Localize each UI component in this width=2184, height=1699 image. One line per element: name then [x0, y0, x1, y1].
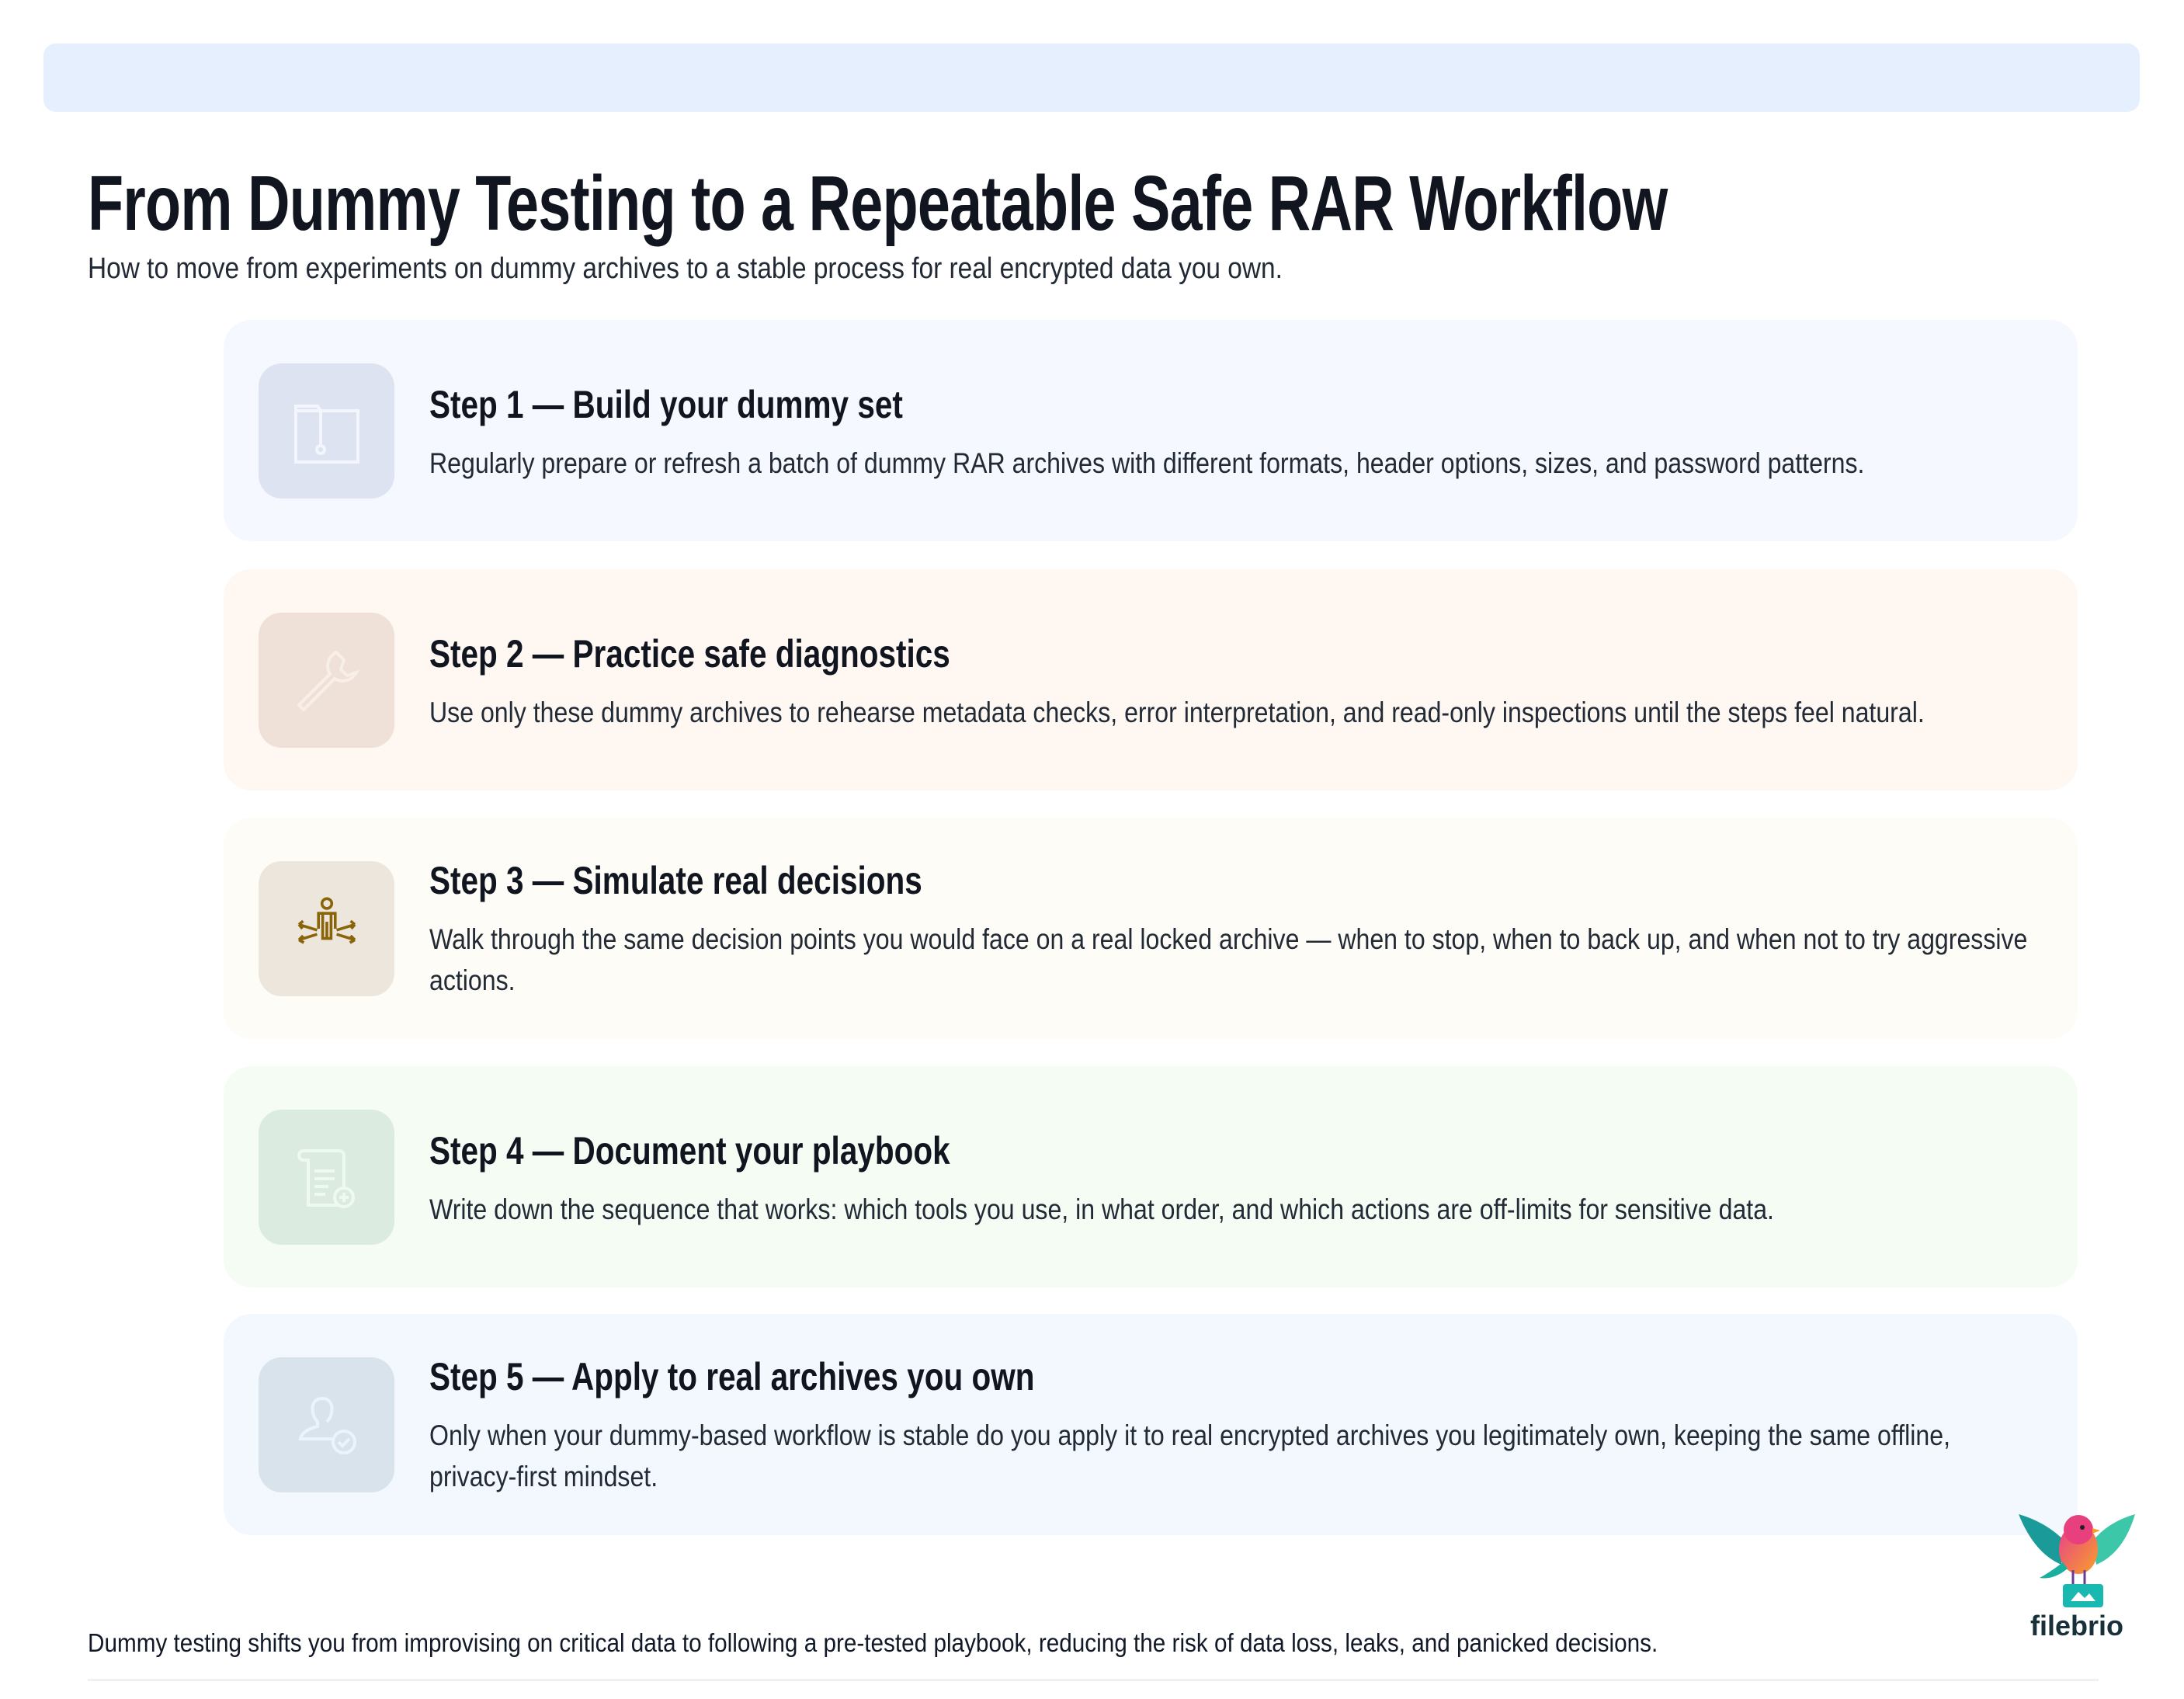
- subtitle: How to move from experiments on dummy archives to a stable process for real encrypted data you own.: [88, 252, 1283, 285]
- text: Write down the sequence that works: which tools you use, in what order, and which actions are off-limits for sensitive data.: [429, 1193, 1774, 1225]
- logo text: filebrio: [2030, 1610, 2123, 1642]
- icon: wrench: [259, 613, 394, 748]
- heading: Step 4 — Document your playbook: [429, 1129, 950, 1173]
- panel: step 5: [224, 1314, 2078, 1535]
- panel: step 4: [224, 1066, 2078, 1287]
- heading: Step 2 — Practice safe diagnostics: [429, 632, 950, 676]
- icon: user check: [259, 1357, 394, 1492]
- icon: decision person: [259, 861, 394, 996]
- heading: Step 1 — Build your dummy set: [429, 383, 903, 426]
- panel: step 3: [224, 818, 2078, 1039]
- text: Walk through the same decision points you would face on a real locked archive — when to stop, when to back up, and when not to try aggressive actions.: [429, 923, 2027, 996]
- panel: step 2: [224, 569, 2078, 790]
- icon: document scroll: [259, 1110, 394, 1245]
- panel: step 1: [224, 320, 2078, 541]
- icon: zip folder: [259, 363, 394, 499]
- top banner bar: [43, 43, 2140, 112]
- text: Regularly prepare or refresh a batch of dummy RAR archives with different formats, header options, sizes, and password patterns.: [429, 447, 1864, 479]
- text: Only when your dummy-based workflow is stable do you apply it to real encrypted archives you legitimately own, keeping the same offline, privacy‑first mindset.: [429, 1419, 1950, 1492]
- footer note: Dummy testing shifts you from improvising on critical data to following a pre-tested playbook, reducing the risk of data loss, leaks, and panicked decisions.: [88, 1628, 1658, 1657]
- text: Use only these dummy archives to rehearse metadata checks, error interpretation, and read-only inspections until the steps feel natural.: [429, 697, 1925, 728]
- logo: filebrio bird: [2019, 1514, 2135, 1642]
- heading: Step 3 — Simulate real decisions: [429, 859, 922, 902]
- heading: Step 5 — Apply to real archives you own: [429, 1355, 1034, 1398]
- title: From Dummy Testing to a Repeatable Safe RAR Workflow: [88, 160, 1668, 247]
